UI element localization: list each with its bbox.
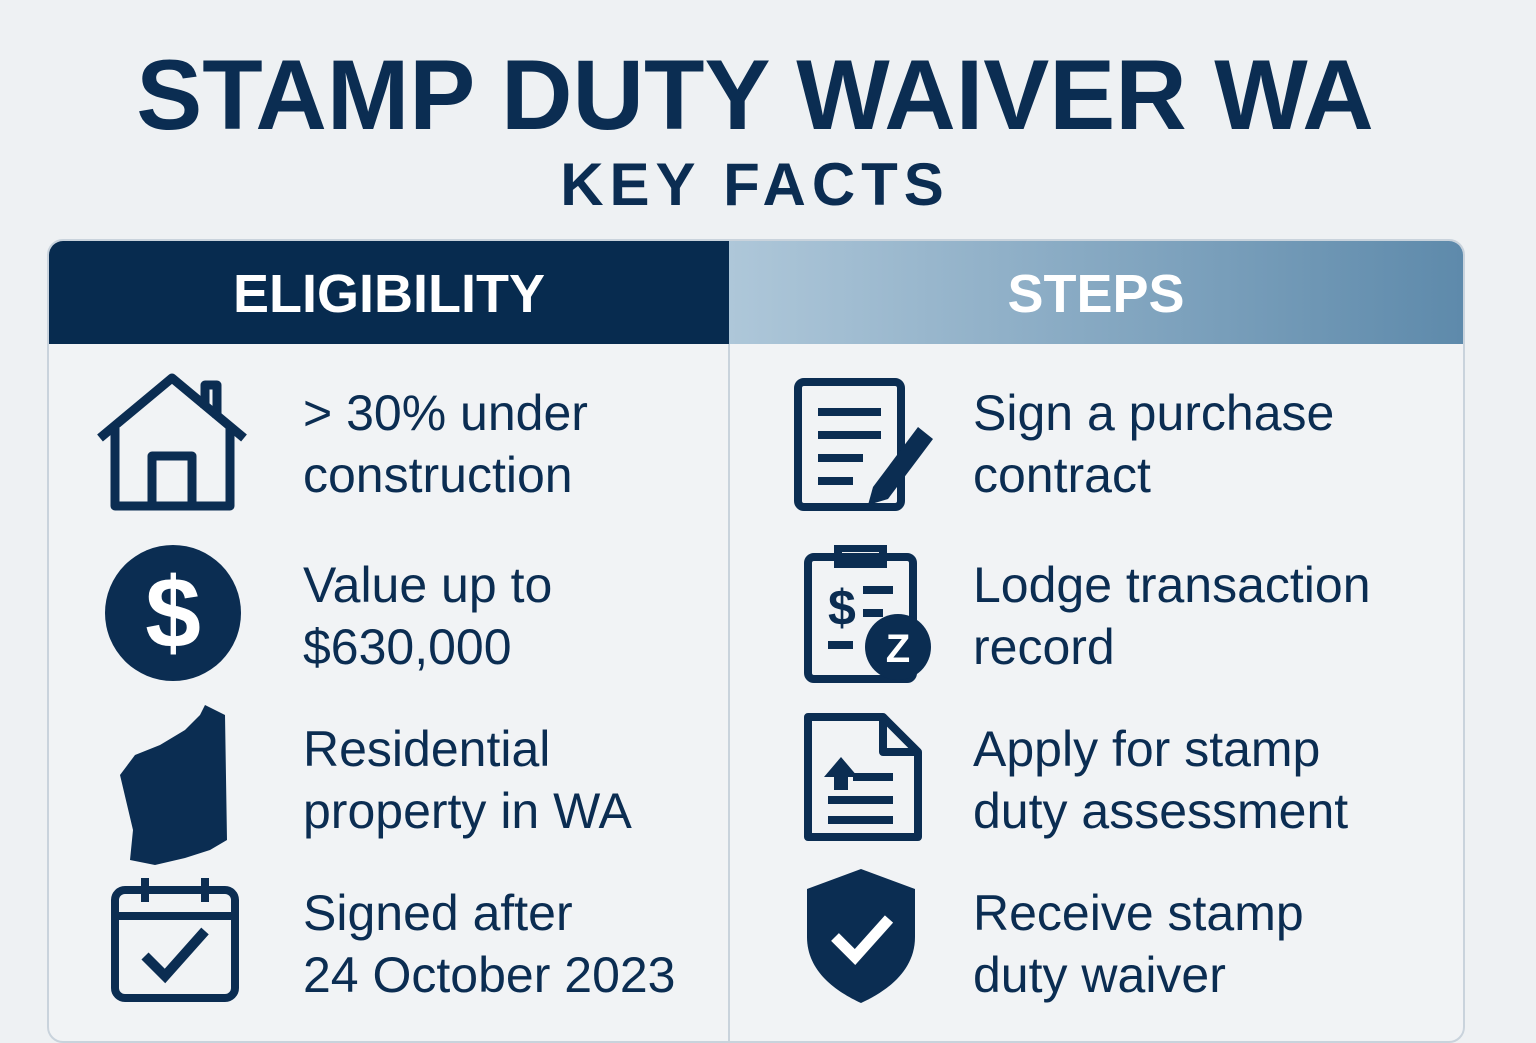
text: receive: Receive stamp <box>973 885 1304 941</box>
icon: assessment document <box>804 713 922 841</box>
icon: dollar: $ <box>145 557 201 669</box>
text: lodge <box>973 557 1371 675</box>
text: value <box>303 557 552 675</box>
text: under construction: > 30% under <box>303 385 588 441</box>
text: lodge: Lodge transaction <box>973 557 1371 613</box>
header: steps <box>729 241 1463 344</box>
text: residential: property in WA <box>303 783 632 839</box>
icon: WA map <box>120 705 227 865</box>
icon: dollar <box>105 545 241 681</box>
header: eligibility: ELIGIBILITY <box>233 264 545 324</box>
title: STAMP DUTY WAIVER WA <box>136 39 1374 150</box>
header: steps: STEPS <box>1007 264 1185 324</box>
icon: calendar <box>111 878 239 1002</box>
text: sign contract <box>973 385 1334 503</box>
text: apply <box>973 721 1348 839</box>
icon: transaction record: Z <box>886 627 910 671</box>
text: value: Value up to <box>303 557 552 613</box>
text: signed after: Signed after <box>303 885 573 941</box>
icon: shield <box>807 869 915 1003</box>
icon: contract <box>794 378 933 511</box>
text: under construction: construction <box>303 447 573 503</box>
icon: house <box>97 374 247 510</box>
panel: key facts table <box>47 239 1465 1043</box>
text: under construction <box>303 385 588 503</box>
subtitle: KEY FACTS <box>560 151 950 218</box>
text: apply: duty assessment <box>973 783 1348 839</box>
icon: transaction record: $ <box>828 580 856 636</box>
text: residential: Residential <box>303 721 550 777</box>
text: apply: Apply for stamp <box>973 721 1320 777</box>
icon: transaction record <box>804 545 931 683</box>
text: sign contract: Sign a purchase <box>973 385 1334 441</box>
text: lodge: record <box>973 619 1115 675</box>
text: sign contract: contract <box>973 447 1151 503</box>
header: eligibility <box>49 241 729 344</box>
text: receive <box>973 885 1304 1003</box>
text: value: $630,000 <box>303 619 512 675</box>
text: signed after <box>303 885 676 1003</box>
text: residential <box>303 721 632 839</box>
text: signed after: 24 October 2023 <box>303 947 676 1003</box>
text: receive: duty waiver <box>973 947 1226 1003</box>
